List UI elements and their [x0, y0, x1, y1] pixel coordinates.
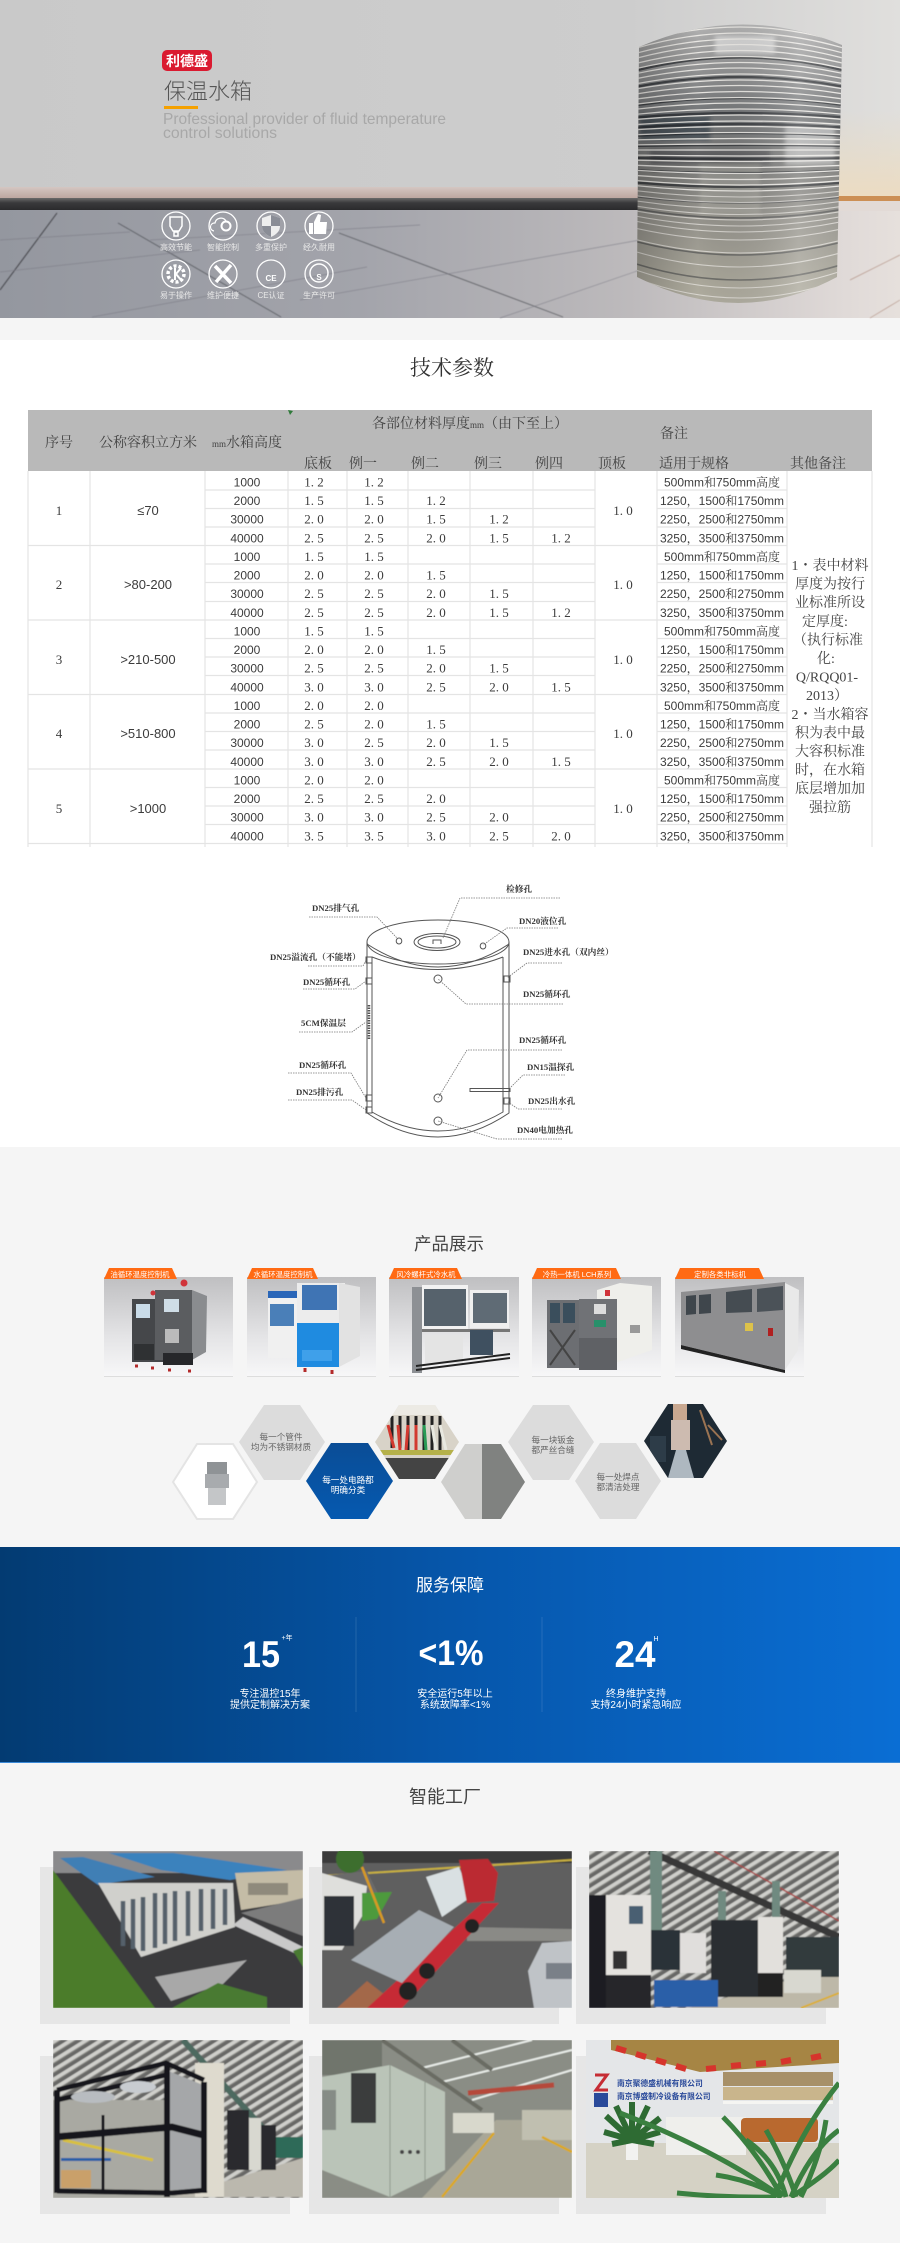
label: circulation mid right	[438, 1034, 567, 1098]
table header: 其他备注	[790, 456, 846, 472]
label: inlet: DN25进水孔（双内丝）	[523, 946, 614, 957]
table header: 适用于规格	[659, 455, 729, 472]
table rows: group 4: 2. 0	[489, 754, 509, 769]
table header: 公称容积立方米	[99, 434, 197, 451]
table header: mm水箱高度	[212, 434, 282, 451]
table rows: group 5	[56, 772, 784, 843]
label: temperature probe: DN15温探孔	[527, 1061, 575, 1072]
table rows: group 4: 2. 0	[426, 735, 446, 750]
table rows: group 4: 3250，3500和3750mm	[660, 755, 784, 769]
table rows: group 1: 2. 5	[304, 530, 324, 545]
label: level hole: DN20液位孔	[519, 915, 567, 926]
technical parameters section background	[0, 340, 900, 1147]
table rows: group 5: 3. 5	[364, 828, 384, 843]
table rows: group 3: 2. 0	[364, 642, 384, 657]
stat: failure below 1 percent: 安全运行5年以上	[417, 1687, 493, 1700]
table rows: group 4: 3. 0	[364, 754, 384, 769]
label: insulation layer	[299, 1017, 366, 1032]
card: oil temperature controller: 油循环温度控制机	[110, 1270, 170, 1279]
other remarks note: （执行标准	[793, 631, 863, 648]
table rows: group 1: 1	[56, 503, 62, 518]
table rows: group 1: 500mm和750mm高度	[664, 474, 780, 490]
table header: 例四	[535, 456, 563, 472]
other remarks note: 时，在水箱	[795, 762, 865, 779]
table rows: group 4: 1000	[234, 699, 261, 713]
table rows: group 1	[56, 474, 784, 545]
table rows: group 1: 2000	[234, 494, 261, 508]
stat: 24 hours: 24	[614, 1634, 656, 1675]
card: custom non-standard machines	[675, 1268, 804, 1377]
table rows: group 4: 2. 0	[304, 698, 324, 713]
hexagon: circuit classification, blue: 每一处电路都	[322, 1474, 374, 1485]
table rows: group 5: 3. 0	[426, 828, 446, 843]
label: electric heating: DN40电加热孔	[517, 1124, 573, 1135]
table rows: group 4: 40000	[230, 755, 264, 769]
hexagon: weld points text: 都清洁处理	[597, 1481, 640, 1492]
table header: 序号	[45, 435, 73, 451]
stat: 24 hours: 终身维护支持	[606, 1687, 666, 1700]
table rows: group 3: 40000	[230, 680, 264, 694]
table rows: group 2: 1. 0	[613, 577, 633, 592]
icon: CE mark: CE认证	[257, 290, 285, 300]
feature icons	[160, 212, 335, 300]
icon: maintenance tools: 维护便捷	[207, 290, 239, 300]
table rows: group 5: 2. 0	[364, 772, 384, 787]
label: circulation upper left: DN25循环孔	[303, 976, 351, 987]
table rows: group 3: 30000	[230, 662, 264, 676]
table rows: group 4: 3. 0	[304, 735, 324, 750]
label: outlet: DN25出水孔	[528, 1095, 576, 1106]
table rows: group 1: 2. 0	[364, 512, 384, 527]
table rows: group 4: >510-800	[120, 726, 176, 741]
card: oil temperature controller	[104, 1268, 233, 1377]
table rows: group 3: 1000	[234, 624, 261, 638]
label: vent	[309, 902, 397, 938]
other remarks note: 1・表中材料	[792, 557, 868, 574]
other remarks note: 积为表中最	[795, 724, 865, 741]
table rows: group 4: 1. 0	[613, 726, 633, 741]
card: air cooled screw chiller	[389, 1268, 519, 1377]
card: water temperature controller: 水循环温度控制机	[253, 1270, 313, 1279]
divider lines	[356, 1617, 542, 1712]
label: circulation upper right	[438, 979, 571, 1004]
table rows: group 2: 2000	[234, 569, 261, 583]
label: circulation lower left	[288, 1059, 366, 1098]
table rows: group 1: 1000	[234, 476, 261, 490]
table rows: group 2: 30000	[230, 587, 264, 601]
table header: 底板	[304, 455, 332, 472]
table rows: group 3: 1. 5	[364, 624, 384, 638]
stat: 24 hours: H	[653, 1636, 659, 1643]
table rows: group 4: 2. 5	[304, 717, 324, 732]
table rows: group 4: 4	[56, 726, 63, 741]
table rows: group 2: 1. 5	[489, 586, 509, 601]
service guarantee band	[0, 1547, 900, 1763]
product cards	[104, 1268, 804, 1377]
icon: production licence	[303, 260, 335, 300]
table header: 例一	[349, 456, 377, 472]
label: circulation lower left: DN25循环孔	[299, 1059, 347, 1070]
table rows: group 2: 2	[56, 577, 62, 592]
table rows: group 1: 3250，3500和3750mm	[660, 531, 784, 545]
table header: 各部位材料厚度mm（由下至上）	[372, 415, 568, 432]
table rows: group 5: 2. 5	[489, 828, 509, 843]
table rows: group 4: 2. 5	[364, 735, 384, 750]
table rows: group 3: >210-500	[120, 652, 176, 667]
table rows: group 5: 2. 0	[489, 810, 509, 825]
wall signage text: 南京聚德盛机械有限公司	[617, 2078, 703, 2088]
label: inlet	[507, 946, 614, 978]
table rows: group 3: 2. 5	[304, 661, 324, 676]
table rows: group 1: 2. 0	[426, 530, 446, 545]
label: electric heating	[438, 1121, 573, 1139]
other remarks note: 业标准所设	[795, 594, 865, 611]
table rows: group 1: 2250，2500和2750mm	[660, 513, 784, 527]
hexagon: sheet metal panel	[441, 1444, 526, 1519]
other remarks note: 化:	[817, 651, 835, 667]
table rows: group 5: 3. 5	[304, 828, 324, 843]
heading: smart factory: 智能工厂	[409, 1787, 481, 1807]
icon: CE mark: CE	[265, 274, 277, 283]
table rows: group 1: 1. 5	[489, 530, 509, 545]
table rows: group 1: 1. 5	[304, 493, 324, 508]
icon: production licence: S	[316, 273, 322, 282]
table rows: group 5: 500mm和750mm高度	[664, 772, 780, 787]
service heading: 服务保障	[416, 1576, 484, 1595]
hexagon: stainless pipes text: 每一个管件	[260, 1431, 303, 1442]
table rows: group 3: 1. 5	[489, 661, 509, 676]
stat: 15 years: 专注温控15年	[239, 1687, 301, 1700]
table rows: group 5: 2. 0	[426, 791, 446, 806]
stat: 15 years: 15	[242, 1634, 280, 1675]
table rows: group 3: 1. 5	[426, 642, 446, 657]
photo: workshop aisle with cabinets	[322, 2040, 572, 2198]
table rows: group 4: 1250，1500和1750mm	[660, 718, 784, 732]
hexagon photo: wiring terminals	[375, 1405, 459, 1479]
table header	[28, 410, 872, 472]
other remarks note: 底层增加加	[795, 780, 865, 797]
table rows: group 4: 1. 5	[489, 735, 509, 750]
hexagon: weld points text: 每一处焊点	[597, 1471, 640, 1482]
table rows: group 2: 1. 2	[551, 605, 571, 620]
icon: CE mark	[257, 260, 285, 300]
table header: 备注	[660, 426, 688, 442]
table rows: group 3: 3. 0	[304, 679, 324, 694]
table rows: group 1: 1250，1500和1750mm	[660, 494, 784, 508]
table rows: group 5: 1000	[234, 773, 261, 787]
table rows: group 4	[56, 698, 784, 769]
photo: production workshop machines	[589, 1851, 839, 2008]
label: overflow: DN25溢流孔（不能堵）	[270, 951, 361, 962]
table rows: group 2: 3250，3500和3750mm	[660, 606, 784, 620]
hero subtitle: control solutions	[163, 125, 277, 142]
table rows: group 3: 2. 0	[489, 679, 509, 694]
hexagon: stainless pipes text: 均为不锈钢材质	[251, 1441, 311, 1452]
hexagon: sheet metal text: 都严丝合缝	[532, 1444, 575, 1455]
icon: smart control: 智能控制	[207, 242, 239, 252]
photo: truck loading	[322, 1851, 572, 2008]
table rows: group 2: 1. 5	[426, 568, 446, 583]
label: outlet	[508, 1095, 576, 1109]
table rows: group 1: 2. 5	[364, 530, 384, 545]
icon: energy saving	[160, 212, 192, 252]
tank line drawing	[366, 920, 510, 1137]
label: vent: DN25排气孔	[312, 902, 360, 913]
table rows: group 5: 3. 0	[364, 810, 384, 825]
table rows: group 4: 30000	[230, 736, 264, 750]
table rows: group 5: >1000	[130, 801, 166, 816]
parameter table	[28, 410, 872, 847]
table rows: group 1: 1. 2	[364, 474, 384, 490]
table rows: group 1: ≤70	[137, 503, 159, 518]
stat: 15 years	[230, 1633, 310, 1711]
other remarks note: 厚度为按行	[795, 576, 865, 593]
stat: failure below 1 percent: <1%	[418, 1634, 484, 1673]
orange accent bar	[164, 106, 198, 109]
label: level hole	[483, 915, 567, 945]
hexagon: circuit classification, blue: 明确分类	[331, 1484, 366, 1495]
label: inspection hole: 检修孔	[506, 883, 532, 894]
table rows: group 2: 1250，1500和1750mm	[660, 569, 784, 583]
table rows: group 2: 2. 5	[364, 605, 384, 620]
table rows: group 5: 2. 5	[426, 810, 446, 825]
table rows: group 1: 1. 2	[489, 512, 509, 527]
table rows: group 5: 2. 0	[551, 828, 571, 843]
table rows: group 5: 5	[56, 801, 62, 816]
table rows: group 4: 1. 5	[426, 717, 446, 732]
factory photo backing shadows	[40, 1867, 826, 2214]
table header: 例三	[474, 456, 502, 472]
table header: 例二	[411, 456, 439, 472]
hexagon: stainless pipe fitting	[173, 1444, 257, 1519]
label: circulation upper right: DN25循环孔	[523, 988, 571, 999]
hero subtitle: Professional provider of fluid temperature	[163, 111, 446, 128]
icon: production licence: 生产许可	[303, 290, 335, 300]
icon: easy operation: 易于操作	[160, 290, 192, 300]
table rows: group 3: 2250，2500和2750mm	[660, 662, 784, 676]
card: custom non-standard machines: 定制各类非标机	[694, 1270, 746, 1279]
quality hexagon grid	[173, 1404, 727, 1519]
photo: factory aerial view	[53, 1851, 303, 2008]
icon: thumbs up: 经久耐用	[303, 242, 335, 252]
table rows: group 5: 1. 0	[613, 801, 633, 816]
other remarks note: Q/RQQ01-	[796, 671, 858, 686]
stat: failure below 1 percent: 系统故障率<1%	[420, 1698, 490, 1711]
table rows: group 3: 1. 5	[551, 679, 571, 694]
table rows: group 4: 1. 5	[551, 754, 571, 769]
table rows: group 3: 2000	[234, 643, 261, 657]
heading: product display: 产品展示	[414, 1234, 484, 1254]
table rows: group 1: 1. 2	[426, 493, 446, 508]
table rows: group 2: 2. 0	[426, 586, 446, 601]
table rows: group 2: 2. 0	[304, 568, 324, 583]
table rows: group 3: 1250，1500和1750mm	[660, 643, 784, 657]
stainless steel water tank	[637, 24, 842, 303]
table rows: group 2: 1. 5	[304, 549, 324, 564]
table rows: group 4: 3. 0	[304, 754, 324, 769]
other remarks note: 大容积标准	[795, 743, 865, 760]
table rows: group 2: 1. 5	[364, 549, 384, 564]
table rows: group 1: 40000	[230, 531, 264, 545]
table rows: group 4: 2. 5	[426, 754, 446, 769]
table rows: group 4: 2. 0	[364, 698, 384, 713]
table rows: group 4: 2250，2500和2750mm	[660, 736, 784, 750]
photo: reception hall	[586, 2040, 839, 2198]
table rows: group 3: 3. 0	[364, 679, 384, 694]
icon: thumbs up	[303, 212, 335, 252]
table rows: group 1: 1. 2	[551, 530, 571, 545]
table rows: group 2: 2. 5	[304, 605, 324, 620]
hexagon: weld points text	[575, 1443, 661, 1519]
heading: technical parameters: 技术参数	[410, 356, 494, 380]
table rows: group 3: 500mm和750mm高度	[664, 624, 780, 638]
other remarks note: 2・当水箱容	[792, 706, 868, 723]
label: inspection hole	[443, 883, 560, 938]
hero subtitle	[163, 111, 446, 142]
table rows: group 1: 1. 5	[426, 512, 446, 527]
table rows: group 4: 2000	[234, 718, 261, 732]
table rows: group 2: 2. 0	[364, 568, 384, 583]
label: circulation mid right: DN25循环孔	[519, 1034, 567, 1045]
table rows: group 5: 3250，3500和3750mm	[660, 829, 784, 843]
stat: 15 years: 提供定制解决方案	[230, 1698, 310, 1711]
table rows: group 3: 3250，3500和3750mm	[660, 680, 784, 694]
table rows: group 3: 3	[56, 652, 62, 667]
table rows: group 5: 2. 0	[304, 772, 324, 787]
card: water temperature controller	[247, 1268, 376, 1377]
table rows: group 3: 2. 5	[426, 679, 446, 694]
stat: 15 years: +年	[281, 1633, 293, 1642]
icon: easy operation	[160, 260, 192, 300]
card: chiller heater all-in-one LCH	[532, 1268, 661, 1377]
icon: protection shield: 多重保护	[255, 242, 287, 252]
table rows: group 3: 2. 5	[364, 661, 384, 676]
table rows: group 3: 2. 0	[426, 661, 446, 676]
table rows: group 4: 2. 0	[364, 717, 384, 732]
table rows: group 5: 1250，1500和1750mm	[660, 792, 784, 806]
icon: energy saving: 高效节能	[160, 242, 192, 252]
table rows: group 1: 1. 2	[304, 474, 324, 490]
hero title: 保温水箱	[164, 79, 252, 104]
hexagon photo: welded copper pipe	[644, 1404, 727, 1478]
table rows: group 5: 30000	[230, 811, 264, 825]
other remarks note: 强拉筋	[809, 799, 851, 816]
table rows: group 5: 2. 5	[364, 791, 384, 806]
brand badge: 利德盛	[166, 53, 208, 69]
table rows: group 2: >80-200	[124, 577, 172, 592]
hexagon: stainless pipes text	[239, 1405, 325, 1480]
table rows: group 1: 30000	[230, 513, 264, 527]
card: air cooled screw chiller: 风冷螺杆式冷水机	[396, 1270, 456, 1279]
other remarks note: 2013）	[806, 688, 848, 704]
table rows: group 1: 1. 5	[364, 493, 384, 508]
tank structure diagram	[270, 883, 614, 1139]
photo: black frame chiller in workshop	[53, 2040, 303, 2198]
table rows: group 5: 2. 5	[304, 791, 324, 806]
other remarks note	[792, 557, 868, 816]
table rows: group 3: 1. 5	[304, 624, 324, 638]
icon: protection shield	[255, 212, 287, 252]
table rows: group 1: 2. 0	[304, 512, 324, 527]
hexagon: sheet metal text	[508, 1405, 594, 1480]
table rows: group 2: 2. 0	[426, 605, 446, 620]
table rows: group 5: 3. 0	[304, 810, 324, 825]
stat: 24 hours	[590, 1634, 682, 1711]
table rows: group 5: 2250，2500和2750mm	[660, 811, 784, 825]
table rows: group 4: 500mm和750mm高度	[664, 698, 780, 713]
table header: 顶板	[598, 455, 626, 472]
label: insulation layer: 5CM保温层	[301, 1017, 346, 1028]
table rows: group 3	[56, 624, 784, 694]
table rows: group 3: 2. 0	[304, 642, 324, 657]
table rows: group 1: 1. 0	[613, 503, 633, 518]
icon: maintenance tools	[207, 260, 239, 300]
wall signage text: 南京博盛制冷设备有限公司	[617, 2091, 711, 2101]
hero banner	[0, 0, 900, 335]
brand badge	[162, 50, 212, 71]
table rows: group 3: 1. 0	[613, 652, 633, 667]
label: drain	[288, 1086, 366, 1110]
hexagon: circuit classification, blue	[306, 1443, 393, 1519]
label: temperature probe	[510, 1061, 575, 1088]
stat: failure below 1 percent	[417, 1634, 493, 1711]
label: circulation upper left	[303, 976, 366, 989]
icon: smart control	[207, 212, 239, 252]
table rows: group 2: 2. 5	[304, 586, 324, 601]
table rows: group 5: 40000	[230, 829, 264, 843]
wall signage text	[617, 2078, 711, 2101]
table rows: group 2: 1000	[234, 550, 261, 564]
hexagon: sheet metal text: 每一块钣金	[532, 1434, 575, 1445]
other remarks note: 定厚度:	[802, 613, 848, 630]
table rows: group 2: 2250，2500和2750mm	[660, 587, 784, 601]
table grid	[28, 471, 872, 847]
card: chiller heater all-in-one LCH: 冷热一体机 LCH系列	[543, 1270, 611, 1279]
hero background: wall and floor	[0, 0, 900, 318]
label: overflow	[270, 951, 366, 966]
stat: 24 hours: 支持24小时紧急响应	[590, 1698, 682, 1711]
table rows: group 2	[56, 549, 784, 620]
table rows: group 2: 2. 5	[364, 586, 384, 601]
label: drain: DN25排污孔	[296, 1086, 344, 1097]
table rows: group 5: 2000	[234, 792, 261, 806]
table rows: group 2: 40000	[230, 606, 264, 620]
table rows: group 2: 1. 5	[489, 605, 509, 620]
table rows: group 2: 500mm和750mm高度	[664, 549, 780, 564]
